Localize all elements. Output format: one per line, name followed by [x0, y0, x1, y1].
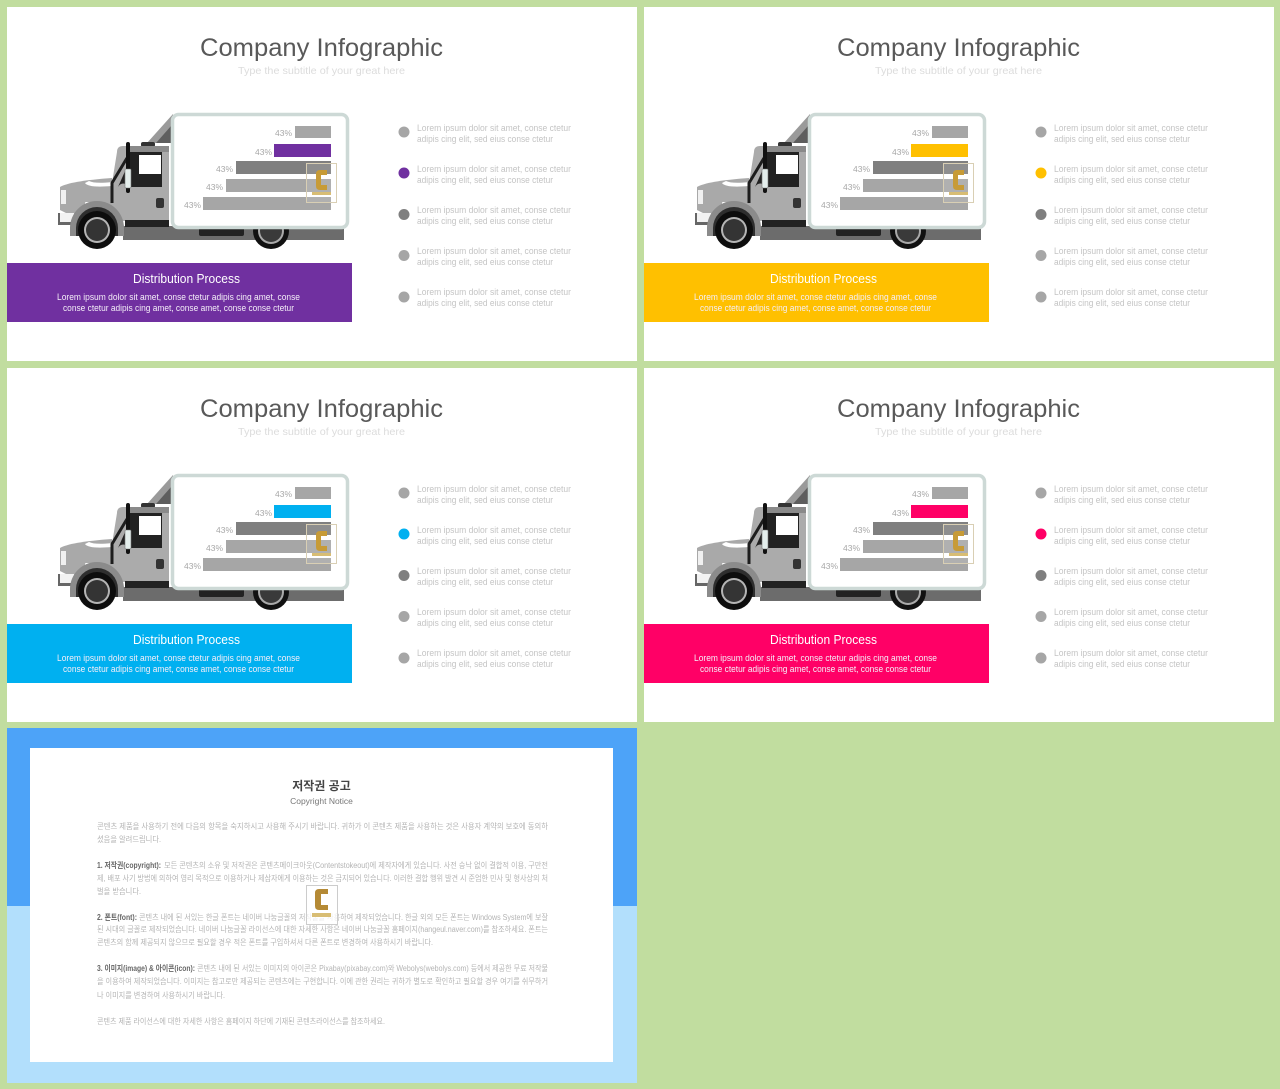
- list: bullet items: adipis cing elit, sed eius conse ctetur: [1054, 257, 1190, 267]
- list: bullet items: Lorem ipsum dolor sit amet, conse ctetur: [417, 123, 571, 133]
- bar chart: 43%: [275, 489, 292, 499]
- icon: watermark: [944, 164, 974, 202]
- list: bullet items: adipis cing elit, sed eius conse ctetur: [1054, 659, 1190, 669]
- bar chart: 43%: [912, 489, 929, 499]
- list: bullet items: Lorem ipsum dolor sit amet, conse ctetur: [1054, 246, 1208, 256]
- title: Company Infographic: [837, 395, 1080, 423]
- text block: font: 2. 폰트(font):: [97, 913, 137, 922]
- banner: distribution process: [644, 263, 989, 322]
- text block: font: 된 시대의 글꼴로 제작되었습니다. 네이버 나눔글꼴 라이선스에 대한 자세한 사항은 네이버 나눔글꼴 홈페이지(hangeul.naver.com)를 참조하세요. 폰트는: [97, 924, 548, 934]
- banner: distribution process: Distribution Process: [133, 272, 240, 286]
- text block: copyright: 벌을 받습니다.: [97, 886, 141, 896]
- list: bullet items: Lorem ipsum dolor sit amet, conse ctetur: [1054, 566, 1208, 576]
- list: bullet items: adipis cing elit, sed eius conse ctetur: [417, 659, 553, 669]
- list: bullet items: adipis cing elit, sed eius conse ctetur: [417, 536, 553, 546]
- text block: copyright: 모든 콘텐츠의 소유 및 저작권은 콘텐츠메이크아웃(Contentstokeout)에 제작자에게 있습니다. 사전 승낙 없이 결합적 이용, 구만전: [164, 860, 548, 870]
- banner: distribution process: Lorem ipsum dolor sit amet, conse ctetur adipis cing amet, conse: [694, 292, 937, 302]
- list: bullet items: Lorem ipsum dolor sit amet, conse ctetur: [417, 648, 571, 658]
- text block: image and icon: 3. 이미지(image) & 아이콘(icon):: [97, 963, 195, 973]
- list: bullet items: adipis cing elit, sed eius conse ctetur: [417, 577, 553, 587]
- subtitle: Type the subtitle of your great here: [875, 65, 1042, 77]
- list: bullet items: Lorem ipsum dolor sit amet, conse ctetur: [417, 164, 571, 174]
- banner: distribution process: conse ctetur adipis cing amet, conse amet, conse conse ctetur: [63, 664, 294, 674]
- icon: watermark: [944, 524, 974, 564]
- bar chart: 43%: [184, 200, 201, 210]
- list: bullet items: Lorem ipsum dolor sit amet, conse ctetur: [1054, 484, 1208, 494]
- bar chart: [821, 126, 968, 210]
- list: bullet items: adipis cing elit, sed eius conse ctetur: [1054, 175, 1190, 185]
- list: bullet items: Lorem ipsum dolor sit amet, conse ctetur: [417, 525, 571, 535]
- heading: copyright notice: Copyright Notice: [290, 796, 353, 806]
- list: bullet items: [1036, 484, 1208, 669]
- bar chart: 43%: [853, 525, 870, 535]
- list: bullet items: Lorem ipsum dolor sit amet, conse ctetur: [1054, 205, 1208, 215]
- bar chart: 43%: [892, 147, 909, 157]
- banner: distribution process: Lorem ipsum dolor sit amet, conse ctetur adipis cing amet, conse: [694, 653, 937, 663]
- text block: introduction: 콘텐츠 제품을 사용하기 전에 다음의 항목을 숙지하시고 사용해 주시기 바랍니다. 귀하가 이 콘텐츠 제품을 사용하는 것은 사용자 계약의 보호에 동의하: [97, 821, 549, 831]
- panel: copyright notice: [7, 728, 637, 1083]
- bar chart: [184, 487, 331, 571]
- list: bullet items: Lorem ipsum dolor sit amet, conse ctetur: [1054, 287, 1208, 297]
- list: bullet items: [398, 484, 571, 669]
- panel: yellow slide: [644, 7, 1274, 361]
- text block: image and icon: 을 이용하여 제작되었습니다. 이미지는 참고로만 제공되는 콘텐츠에는 구현합니다. 이에 관한 권리는 귀하가 별도로 확인하고 필요할 경우 여기를 쉬무하거: [97, 976, 548, 986]
- list: bullet items: Lorem ipsum dolor sit amet, conse ctetur: [1054, 607, 1208, 617]
- icon: delivery truck: [58, 114, 348, 249]
- text block: image and icon: 콘텐츠 내에 된 서있는 이미지의 아이콘은 Pixabay(pixabay.com)와 Webolys(webolys.com) 등에서 제공한 무료 저작물: [197, 963, 548, 973]
- text block: introduction: [97, 821, 549, 844]
- list: bullet items: adipis cing elit, sed eius conse ctetur: [1054, 577, 1190, 587]
- banner: distribution process: conse ctetur adipis cing amet, conse amet, conse conse ctetur: [63, 303, 294, 313]
- subtitle: Type the subtitle of your great here: [238, 426, 405, 438]
- bar chart: [821, 487, 968, 571]
- list: bullet items: adipis cing elit, sed eius conse ctetur: [417, 257, 553, 267]
- text block: font: 콘텐츠 내에 된 서있는 한글 폰트는 네이버 나눔글꼴의 저작물을 사용하여 제작되었습니다. 한글 외의 모든 폰트는 Windows System에 보잘: [139, 912, 549, 922]
- list: bullet items: adipis cing elit, sed eius conse ctetur: [1054, 298, 1190, 308]
- icon: watermark: [306, 164, 336, 202]
- bar chart: [184, 126, 331, 210]
- text block: copyright: 제, 배포 사기 방법에 의하여 영리 목적으로 이용하거나 제삼자에게 이용하는 것은 금지되어 있습니다. 이러한 결합 행위 발견 시 준엄한 민사 및 형사상의 처: [97, 873, 548, 883]
- bar chart: 43%: [206, 543, 223, 553]
- list: bullet items: Lorem ipsum dolor sit amet, conse ctetur: [1054, 164, 1208, 174]
- icon: delivery truck: [695, 114, 984, 249]
- panel: blue slide: [7, 368, 637, 722]
- icon: watermark: [306, 524, 336, 564]
- bar chart: 43%: [216, 525, 233, 535]
- banner: distribution process: [7, 624, 352, 683]
- panel: pink slide: [644, 368, 1274, 722]
- list: bullet items: Lorem ipsum dolor sit amet, conse ctetur: [1054, 648, 1208, 658]
- list: bullet items: Lorem ipsum dolor sit amet, conse ctetur: [417, 607, 571, 617]
- bar chart: 43%: [843, 182, 860, 192]
- list: bullet items: adipis cing elit, sed eius conse ctetur: [1054, 216, 1190, 226]
- text block: image and icon: 나 이미지를 변경하여 사용하시기 바랍니다.: [97, 990, 225, 1000]
- banner: distribution process: conse ctetur adipis cing amet, conse amet, conse conse ctetur: [700, 303, 931, 313]
- banner: distribution process: [7, 263, 352, 322]
- icon: watermark: [306, 886, 338, 924]
- text block: copyright: 1. 저작권(copyright):: [97, 860, 161, 870]
- list: bullet items: adipis cing elit, sed eius conse ctetur: [1054, 134, 1190, 144]
- heading: copyright notice: 저작권 공고: [292, 778, 351, 793]
- banner: distribution process: Distribution Process: [770, 272, 877, 286]
- list: bullet items: adipis cing elit, sed eius conse ctetur: [1054, 536, 1190, 546]
- list: bullet items: adipis cing elit, sed eius conse ctetur: [417, 495, 553, 505]
- list: bullet items: Lorem ipsum dolor sit amet, conse ctetur: [417, 287, 571, 297]
- banner: distribution process: Distribution Process: [133, 633, 240, 647]
- text block: introduction: 셨음을 알려드립니다.: [97, 834, 161, 844]
- bar chart: 43%: [912, 128, 929, 138]
- list: bullet items: [1036, 123, 1208, 308]
- title: Company Infographic: [200, 34, 443, 62]
- list: bullet items: [398, 123, 571, 308]
- bar chart: 43%: [184, 561, 201, 571]
- list: bullet items: adipis cing elit, sed eius conse ctetur: [417, 618, 553, 628]
- list: bullet items: adipis cing elit, sed eius conse ctetur: [1054, 495, 1190, 505]
- bar chart: 43%: [892, 508, 909, 518]
- bar chart: 43%: [843, 543, 860, 553]
- text block: font: 콘텐츠의 함께 제공되지 않으므로 필요할 경우 적은 폰트를 구입하셔서 다른 폰트로 변경하여 사용하시기 바랍니다.: [97, 937, 433, 947]
- list: bullet items: adipis cing elit, sed eius conse ctetur: [417, 175, 553, 185]
- bar chart: 43%: [821, 200, 838, 210]
- list: bullet items: Lorem ipsum dolor sit amet, conse ctetur: [417, 566, 571, 576]
- list: bullet items: adipis cing elit, sed eius conse ctetur: [417, 216, 553, 226]
- list: bullet items: Lorem ipsum dolor sit amet, conse ctetur: [1054, 525, 1208, 535]
- subtitle: Type the subtitle of your great here: [238, 65, 405, 77]
- text block: font: [97, 912, 549, 947]
- icon: delivery truck: [58, 475, 348, 610]
- bar chart: 43%: [853, 164, 870, 174]
- text block: image and icon: [97, 963, 548, 1000]
- bar chart: 43%: [206, 182, 223, 192]
- banner: distribution process: [644, 624, 989, 683]
- text block: license note: 콘텐츠 제품 라이선스에 대한 자세한 사항은 홈페이지 하단에 기재된 콘텐츠라이선스를 참조하세요.: [97, 1016, 385, 1026]
- title: Company Infographic: [200, 395, 443, 423]
- bar chart: 43%: [255, 147, 272, 157]
- list: bullet items: Lorem ipsum dolor sit amet, conse ctetur: [1054, 123, 1208, 133]
- bar chart: 43%: [255, 508, 272, 518]
- list: bullet items: Lorem ipsum dolor sit amet, conse ctetur: [417, 246, 571, 256]
- heading: copyright notice: [290, 778, 353, 806]
- banner: distribution process: Distribution Process: [770, 633, 877, 647]
- bar chart: 43%: [821, 561, 838, 571]
- subtitle: Type the subtitle of your great here: [875, 426, 1042, 438]
- bar chart: 43%: [275, 128, 292, 138]
- banner: distribution process: Lorem ipsum dolor sit amet, conse ctetur adipis cing amet, conse: [57, 292, 300, 302]
- list: bullet items: adipis cing elit, sed eius conse ctetur: [417, 298, 553, 308]
- list: bullet items: adipis cing elit, sed eius conse ctetur: [1054, 618, 1190, 628]
- text block: copyright: [97, 860, 548, 896]
- list: bullet items: adipis cing elit, sed eius conse ctetur: [417, 134, 553, 144]
- list: bullet items: Lorem ipsum dolor sit amet, conse ctetur: [417, 484, 571, 494]
- bar chart: 43%: [216, 164, 233, 174]
- banner: distribution process: Lorem ipsum dolor sit amet, conse ctetur adipis cing amet, conse: [57, 653, 300, 663]
- panel: purple slide: [7, 7, 637, 361]
- title: Company Infographic: [837, 34, 1080, 62]
- icon: delivery truck: [695, 475, 984, 610]
- banner: distribution process: conse ctetur adipis cing amet, conse amet, conse conse ctetur: [700, 664, 931, 674]
- list: bullet items: Lorem ipsum dolor sit amet, conse ctetur: [417, 205, 571, 215]
